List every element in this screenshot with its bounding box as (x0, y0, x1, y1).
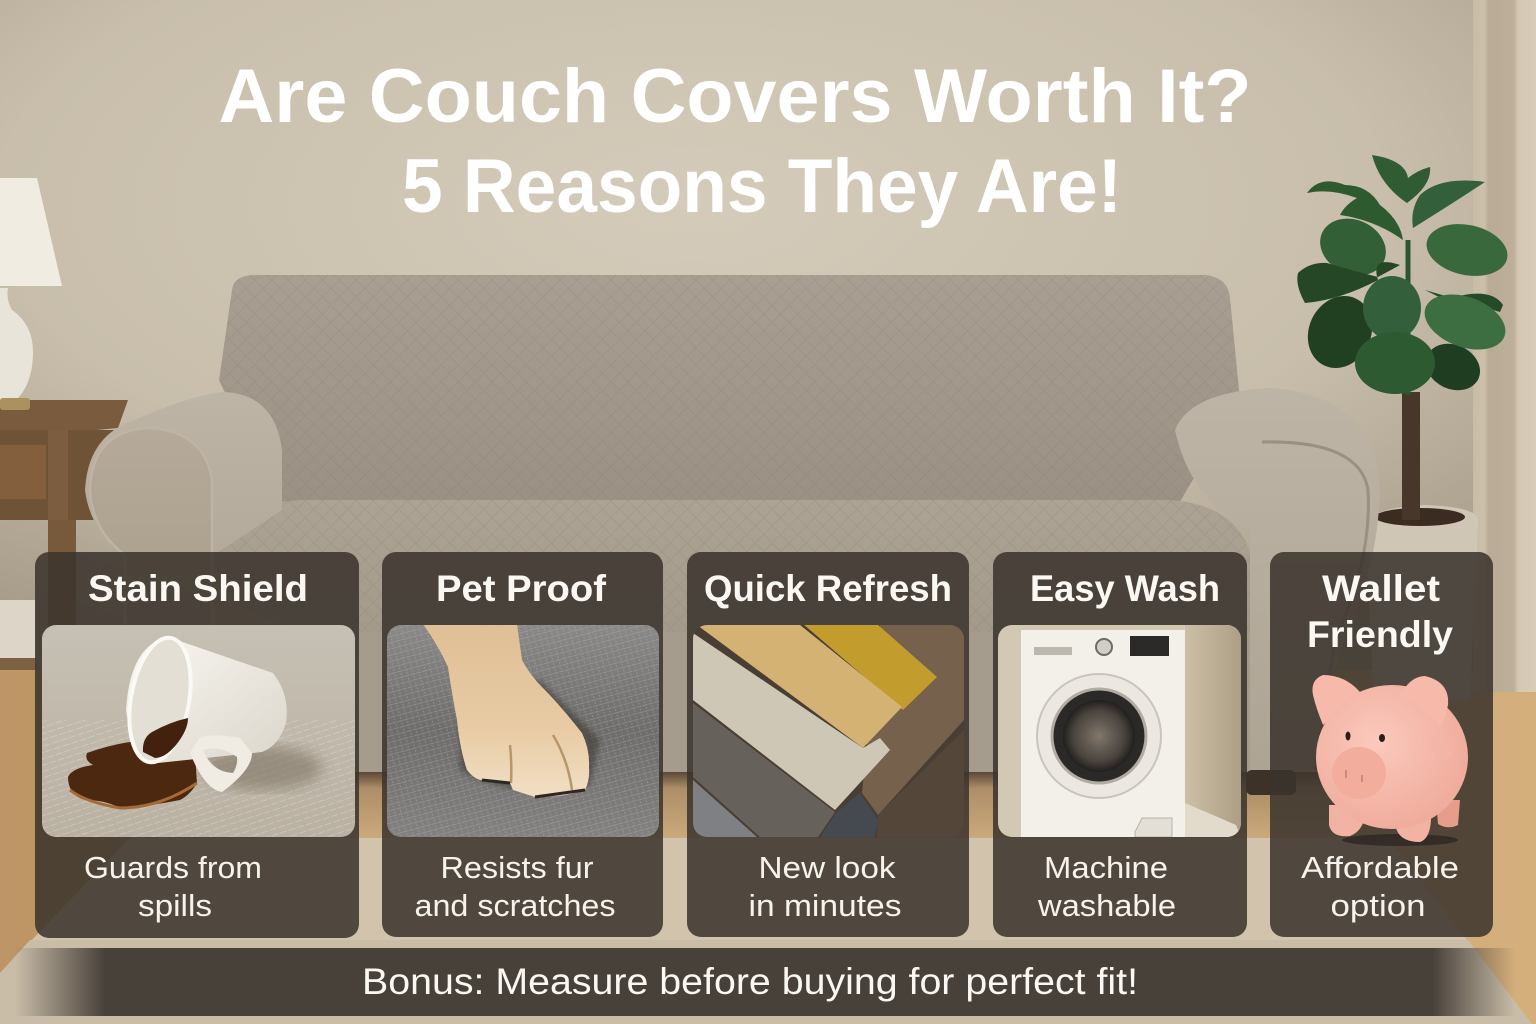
icon: washing machine (998, 625, 1241, 837)
panel: Quick Refresh: in minutes (748, 888, 902, 923)
panel: Stain Shield: spills (138, 888, 212, 923)
heading: Quick Refresh: Quick Refresh (704, 568, 952, 609)
panel: Pet Proof (382, 552, 663, 937)
title: 5 Reasons They Are! (402, 144, 1122, 229)
bonus banner: Bonus: Measure before buying for perfect fit! (362, 961, 1138, 1002)
panel: Easy Wash (993, 552, 1247, 937)
panel: Quick Refresh (687, 552, 969, 937)
panel: Stain Shield (35, 552, 359, 938)
side table and lamp (0, 178, 128, 658)
label: New look in minutes: New look (758, 850, 896, 885)
icon: spilled coffee mug (42, 625, 355, 837)
heading: Stain Shield: Stain Shield (88, 568, 308, 609)
heading: Wallet Friendly: Wallet (1322, 568, 1440, 609)
heading: Wallet Friendly (1307, 568, 1453, 655)
sofa (85, 275, 1380, 795)
title (218, 54, 1252, 229)
panel: Pet Proof: and scratches (414, 888, 616, 923)
panel: Wallet Friendly: option (1330, 888, 1426, 923)
panel: Wallet Friendly (1270, 552, 1493, 937)
label: Resists fur and scratches: Resists fur (440, 850, 594, 885)
panel: Easy Wash: washable (1037, 888, 1176, 923)
icon: piggy bank (1312, 675, 1468, 846)
plant (1296, 155, 1513, 700)
heading: Easy Wash: Easy Wash (1030, 568, 1220, 609)
heading: Pet Proof: Pet Proof (436, 568, 607, 609)
label: Affordable option: Affordable (1301, 850, 1459, 885)
label: Guards from spills: Guards from (84, 850, 262, 885)
icon: fabric swatches (693, 623, 964, 837)
heading: Wallet Friendly: Friendly (1307, 614, 1453, 655)
bonus banner (15, 948, 1515, 1016)
label: Machine washable: Machine (1044, 850, 1168, 885)
icon: dog paw (387, 624, 659, 837)
title: Are Couch Covers Worth It? (218, 54, 1252, 139)
